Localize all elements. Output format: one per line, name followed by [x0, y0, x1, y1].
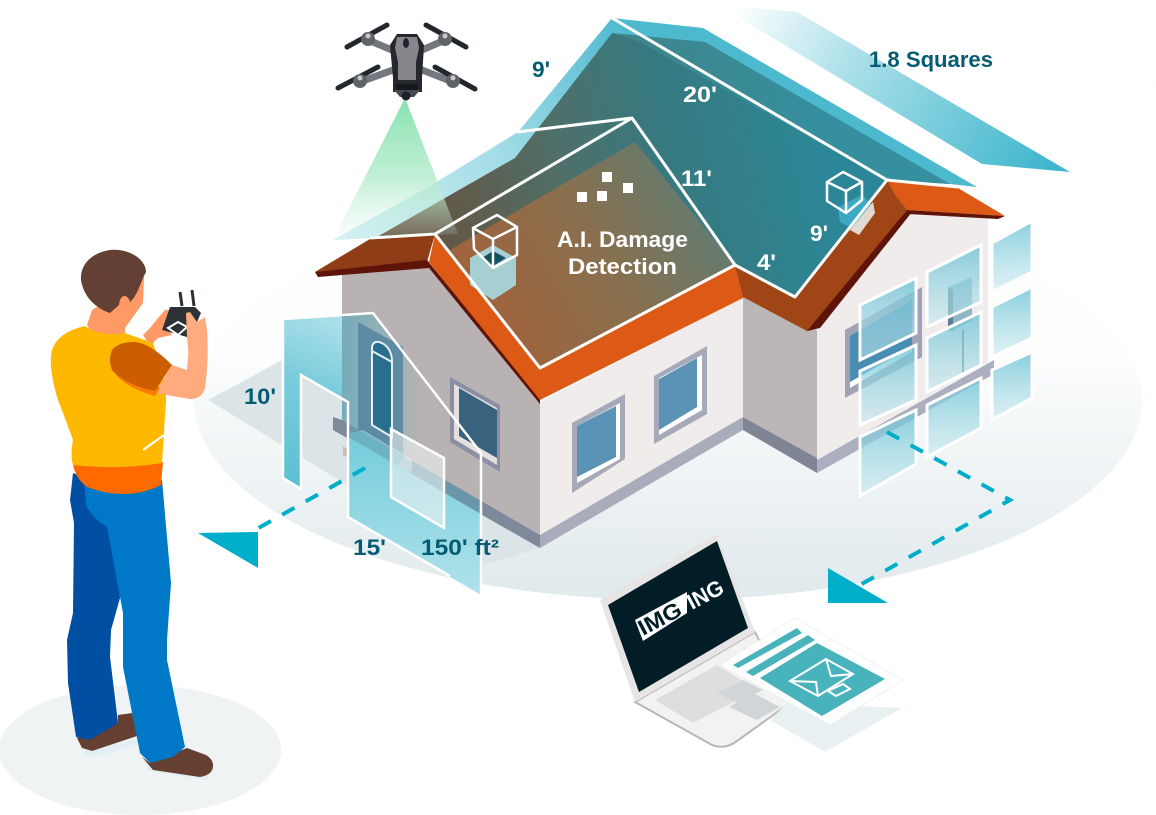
laptop screen [608, 541, 748, 692]
center wall [743, 297, 817, 458]
hand [186, 312, 207, 360]
laptop base [635, 632, 790, 747]
right chimney [838, 195, 875, 235]
left gable eave [315, 234, 540, 404]
shoe shadows [82, 738, 210, 780]
left wall [342, 263, 540, 535]
trouser: far leg [67, 473, 120, 740]
roof square plate [718, 5, 1070, 172]
damage markers [577, 172, 633, 202]
laptop [600, 534, 790, 747]
wire cube: right chimney [827, 172, 862, 213]
label: A.I. Damage Detection [557, 227, 688, 279]
ground ellipse [194, 200, 1142, 600]
left wall measurement panel [283, 313, 481, 595]
trackpad [655, 665, 757, 723]
main roof surface [375, 33, 950, 368]
sleeve rim [110, 355, 160, 396]
label: 4 feet: 4' [757, 250, 776, 275]
left wall window [450, 377, 500, 472]
document [717, 618, 903, 752]
house body [333, 212, 994, 548]
label: ridge left: 9' [532, 57, 550, 82]
left shoe [77, 713, 137, 751]
roof upper highlight band [612, 33, 950, 184]
belt [73, 462, 163, 494]
front window 2 [654, 346, 707, 444]
label: area: 150' ft² [421, 535, 499, 560]
logo box [635, 592, 687, 641]
arrow: scan data to person [198, 468, 365, 568]
label: squares: 1.8 Squares [869, 47, 993, 72]
cloud [1023, 45, 1156, 120]
orange roof edge [429, 234, 745, 400]
back arm [143, 310, 172, 346]
front roof panel [450, 142, 735, 368]
document sheet [720, 618, 903, 725]
cyan roof band [333, 18, 977, 240]
label: A.I. Damage Detection: Detection [568, 254, 677, 279]
house ground shadow [208, 328, 540, 566]
panel over open ground [283, 315, 342, 489]
document shadow on laptop [717, 680, 780, 720]
wall tint through measurement panel [342, 313, 470, 490]
roof measurement outlines [370, 18, 958, 368]
right wall window [845, 287, 922, 398]
laptop screen frame [600, 534, 755, 702]
window measurement panel [391, 429, 444, 528]
door steps [343, 430, 412, 482]
person ground shadow [0, 685, 281, 815]
forearm [155, 330, 208, 399]
shirt [51, 326, 166, 467]
panel outline [283, 313, 481, 595]
label: 9 feet right: 9' [810, 221, 828, 246]
plinth [333, 360, 994, 548]
hair [81, 250, 146, 313]
document lines [733, 628, 815, 676]
label: 11 feet: 11' [681, 166, 712, 191]
panel over plinth [348, 424, 481, 514]
front window 1 [572, 394, 625, 493]
arrow: scan data to laptop [828, 432, 1010, 603]
envelope icon [790, 659, 853, 696]
wall glass panels [860, 221, 1032, 496]
person [51, 250, 213, 780]
label: 15 feet: 15' [353, 535, 386, 560]
controller [162, 290, 201, 337]
wire cube: left chimney [473, 215, 517, 268]
right wall [817, 212, 988, 460]
neck [87, 277, 144, 338]
document shadow [770, 703, 902, 752]
label: A.I. Damage Detection: A.I. Damage [557, 227, 688, 252]
logo text IMG: IMG [634, 597, 686, 640]
trouser: near leg [84, 480, 185, 763]
right roof valley [735, 180, 1005, 331]
drone camera cone [333, 98, 458, 240]
door [358, 322, 403, 457]
logo text ING: ING [683, 575, 728, 614]
panel over forecourt [348, 437, 481, 595]
shirt fold [143, 435, 164, 450]
front wall [540, 297, 745, 535]
wall meter box [948, 277, 972, 372]
right shoe [142, 748, 213, 777]
label: 10 feet: 10' [244, 384, 276, 409]
left chimney [470, 245, 516, 300]
document image block [760, 643, 885, 716]
drone [338, 25, 475, 100]
sleeve [110, 342, 172, 391]
label: 20 feet: 20' [683, 82, 717, 107]
